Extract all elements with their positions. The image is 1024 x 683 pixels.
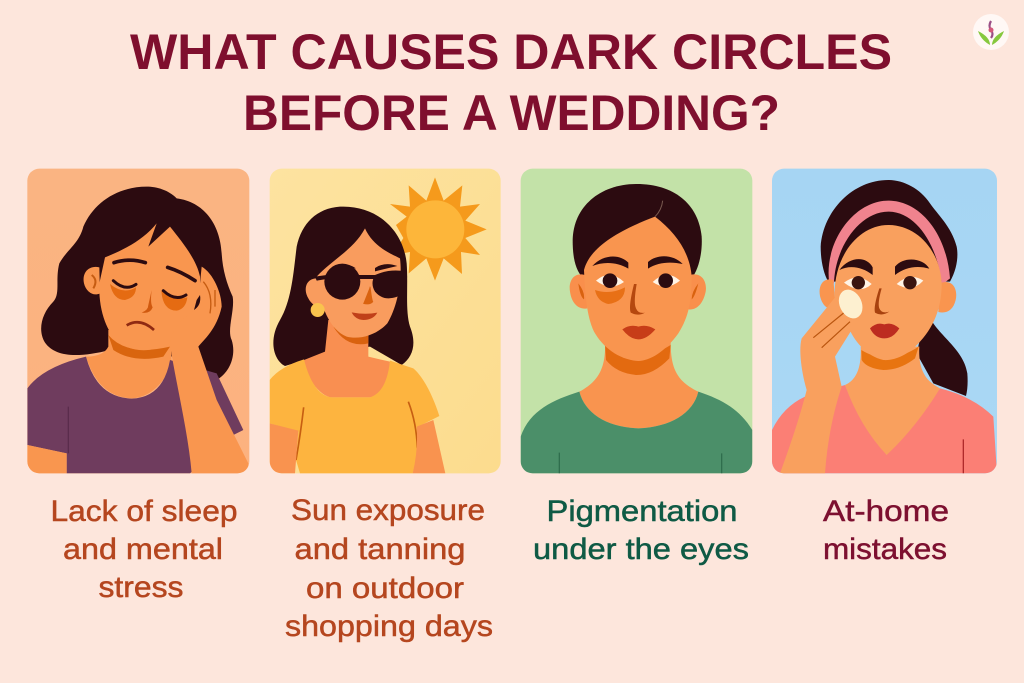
headband (829, 201, 950, 285)
eyes (596, 275, 680, 287)
lips (870, 324, 899, 338)
lips (622, 326, 655, 339)
caption: at-home mistakes (823, 495, 949, 566)
brows (839, 259, 929, 275)
face (317, 228, 401, 338)
nose (363, 287, 373, 304)
forearm and hand (170, 267, 248, 473)
neck shadow (861, 347, 919, 370)
caption: pigmentation (533, 495, 749, 566)
title: WHAT CAUSES DARK CIRCLES (130, 24, 892, 80)
mouth (352, 312, 377, 320)
caption: sun exposure: on outdoor (306, 572, 464, 605)
nose (630, 284, 645, 315)
mouth (127, 322, 154, 330)
shirt (27, 357, 243, 473)
sun (390, 177, 487, 281)
neck shadow (333, 327, 368, 344)
shirt (521, 392, 752, 473)
neck (304, 320, 390, 397)
under-eye pigmentation (595, 287, 625, 304)
nose (875, 288, 889, 314)
title (130, 24, 892, 141)
earring (311, 303, 325, 317)
ears (820, 279, 956, 312)
face (99, 223, 200, 350)
caption: sun exposure: shopping days (285, 610, 493, 643)
hair (573, 184, 702, 278)
ears (570, 274, 706, 309)
hair (41, 187, 233, 379)
eye shadows (110, 284, 136, 300)
left arm (27, 445, 67, 473)
ponytail (917, 310, 968, 396)
shirt (270, 359, 439, 473)
hair (821, 180, 957, 282)
title: BEFORE A WEDDING? (243, 85, 780, 141)
cotton pad (834, 286, 867, 322)
sunglasses (315, 264, 407, 300)
caption: lack of sleep: stress (98, 571, 184, 604)
neck shadow (108, 335, 170, 359)
eyes (844, 277, 923, 289)
caption: at-home mistakes: mistakes (823, 533, 947, 566)
ear (306, 278, 323, 306)
hair (273, 207, 413, 366)
nose (142, 290, 153, 313)
arms (270, 420, 445, 473)
panel: pigmentation (521, 169, 752, 473)
hand and arm (780, 293, 860, 473)
panel: sun exposure (270, 169, 501, 473)
shirt (772, 385, 997, 473)
logo (973, 14, 1009, 50)
brows and eyes (113, 260, 195, 298)
neck (86, 327, 172, 398)
caption: sun exposure: Sun exposure (291, 494, 485, 527)
panel: lack of sleep (27, 169, 249, 473)
face (584, 217, 692, 361)
face (835, 225, 942, 360)
caption: sun exposure: and tanning (294, 533, 466, 566)
brows (592, 256, 683, 269)
brows (349, 264, 398, 272)
caption: at-home mistakes: At-home (823, 495, 949, 528)
caption: lack of sleep: Lack of sleep (50, 495, 238, 528)
caption: sun exposure (285, 494, 493, 643)
caption: lack of sleep: and mental (63, 533, 223, 566)
caption: lack of sleep (50, 495, 238, 604)
neck (579, 340, 698, 428)
neck (845, 347, 940, 455)
ear (84, 267, 100, 294)
caption: pigmentation: under the eyes (533, 533, 749, 566)
panel: at-home mistakes (772, 169, 997, 473)
caption: pigmentation: Pigmentation (546, 495, 738, 528)
neck shadow (605, 345, 671, 375)
